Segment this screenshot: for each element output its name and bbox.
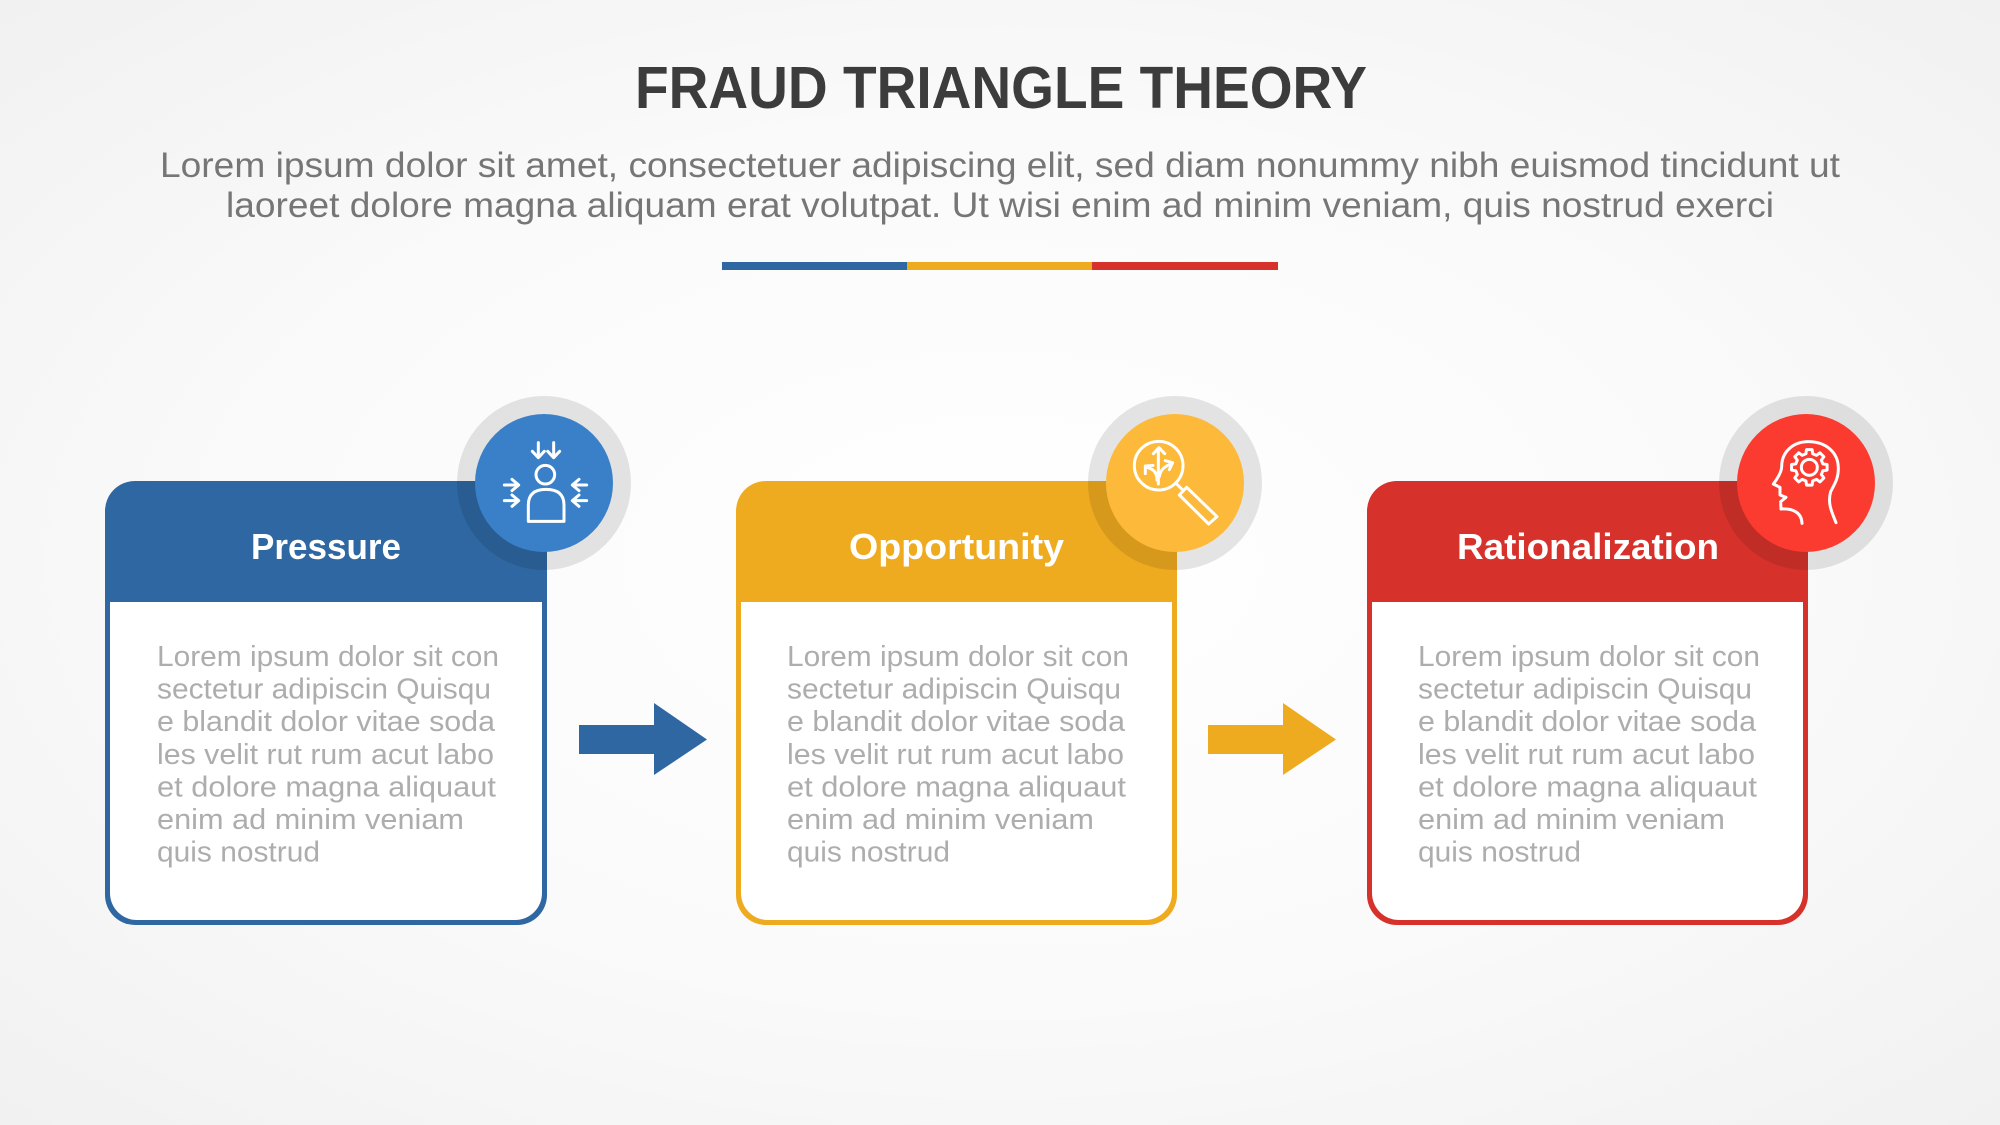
body text: rationalization: quis nostrud bbox=[1418, 837, 1581, 869]
card body: rationalization bbox=[1372, 602, 1803, 920]
body text: opportunity: enim ad minim veniam bbox=[787, 804, 1094, 836]
title: FRAUD TRIANGLE THEORY bbox=[635, 55, 1367, 121]
body text: rationalization: Lorem ipsum dolor sit con bbox=[1418, 641, 1760, 673]
heading: rationalization: Rationalization bbox=[1457, 526, 1719, 567]
body text: opportunity bbox=[787, 641, 1129, 869]
icon badge: magnifier with branching arrows bbox=[1088, 396, 1262, 570]
heading: pressure: Pressure bbox=[251, 526, 401, 567]
body text: pressure: e blandit dolor vitae soda bbox=[157, 706, 496, 738]
body text: rationalization bbox=[1418, 641, 1760, 869]
card body: opportunity bbox=[741, 602, 1172, 920]
body text: rationalization: enim ad minim veniam bbox=[1418, 804, 1725, 836]
body text: opportunity: sectetur adipiscin Quisqu bbox=[787, 674, 1121, 706]
body text: pressure: quis nostrud bbox=[157, 837, 320, 869]
card frame: opportunity bbox=[736, 481, 1177, 925]
card frame: rationalization bbox=[1367, 481, 1808, 925]
icon badge: head with gear bbox=[1719, 396, 1893, 570]
panel: pressure bbox=[105, 396, 631, 925]
body text: opportunity: et dolore magna aliquaut bbox=[787, 771, 1126, 803]
subtitle text block: Lorem ipsum dolor sit amet, consectetuer adipiscing elit, sed diam nonummy nibh euismod tincidunt ut bbox=[160, 146, 1840, 185]
card body: pressure bbox=[110, 602, 542, 920]
subtitle text block: laoreet dolore magna aliquam erat volutpat. Ut wisi enim ad minim veniam, quis nostrud exerci bbox=[226, 186, 1774, 225]
body text: rationalization: sectetur adipiscin Quisqu bbox=[1418, 674, 1752, 706]
icon badge: person under pressure bbox=[457, 396, 631, 570]
body text: rationalization: et dolore magna aliquaut bbox=[1418, 771, 1757, 803]
body text: pressure bbox=[157, 641, 499, 869]
body text: pressure: enim ad minim veniam bbox=[157, 804, 464, 836]
body text: rationalization: e blandit dolor vitae soda bbox=[1418, 706, 1757, 738]
arrow: opportunity to rationalization bbox=[1208, 703, 1336, 775]
panel: opportunity bbox=[736, 396, 1262, 925]
card frame: pressure bbox=[105, 481, 547, 925]
subtitle text block bbox=[160, 146, 1840, 225]
arrow: pressure to opportunity bbox=[579, 703, 707, 775]
heading: opportunity: Opportunity bbox=[849, 526, 1064, 567]
panel: rationalization bbox=[1367, 396, 1893, 925]
body text: opportunity: les velit rut rum acut labo bbox=[787, 739, 1124, 771]
body text: opportunity: e blandit dolor vitae soda bbox=[787, 706, 1126, 738]
body text: pressure: et dolore magna aliquaut bbox=[157, 771, 496, 803]
body text: pressure: sectetur adipiscin Quisqu bbox=[157, 674, 491, 706]
body text: opportunity: Lorem ipsum dolor sit con bbox=[787, 641, 1129, 673]
body text: opportunity: quis nostrud bbox=[787, 837, 950, 869]
body text: pressure: les velit rut rum acut labo bbox=[157, 739, 494, 771]
body text: pressure: Lorem ipsum dolor sit con bbox=[157, 641, 499, 673]
tricolour divider bar bbox=[722, 262, 1278, 270]
body text: rationalization: les velit rut rum acut labo bbox=[1418, 739, 1755, 771]
